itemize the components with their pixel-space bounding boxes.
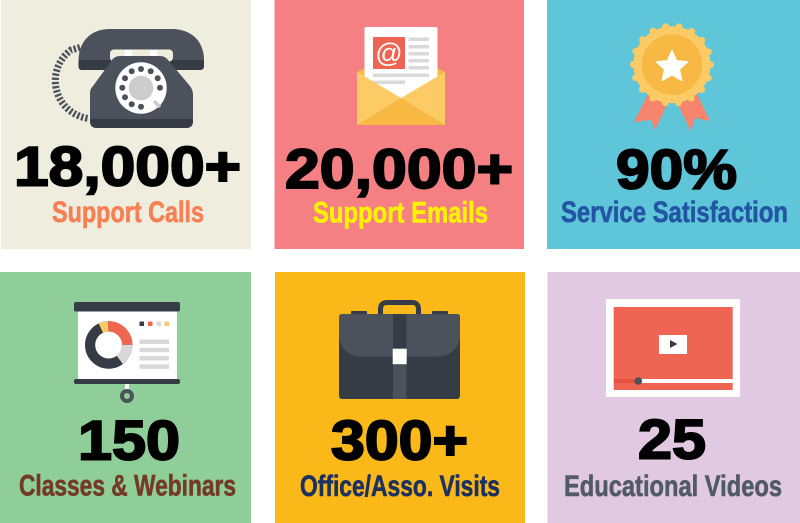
number: 25: 25 (638, 408, 706, 470)
icon: award ribbon (634, 26, 710, 131)
number: 20,000+: 20,000+ (285, 137, 513, 200)
icon: briefcase (339, 302, 460, 399)
number: 300+: 300+ (331, 408, 468, 472)
number: 18,000+: 18,000+ (14, 134, 241, 198)
label: Office/Asso. Visits: Office/Asso. Visits (300, 470, 500, 503)
panel: classes and webinars (0, 272, 251, 523)
icon: presentation screen (74, 302, 180, 401)
panel: service satisfaction (547, 0, 800, 249)
icon: envelope (357, 27, 445, 125)
label: Classes & Webinars: Classes & Webinars (19, 470, 236, 502)
panel: support emails (274, 0, 524, 249)
number: 150: 150 (78, 408, 180, 472)
icon: video player (606, 299, 740, 397)
icon: envelope: @ (375, 38, 403, 68)
label: Support Calls: Support Calls (52, 196, 204, 229)
number: 90%: 90% (616, 138, 737, 200)
icon: telephone (55, 29, 204, 128)
panel: support calls (1, 0, 251, 249)
label: Support Emails: Support Emails (313, 196, 488, 230)
panel: educational videos (548, 272, 800, 523)
panel: office and association visits (275, 272, 525, 523)
